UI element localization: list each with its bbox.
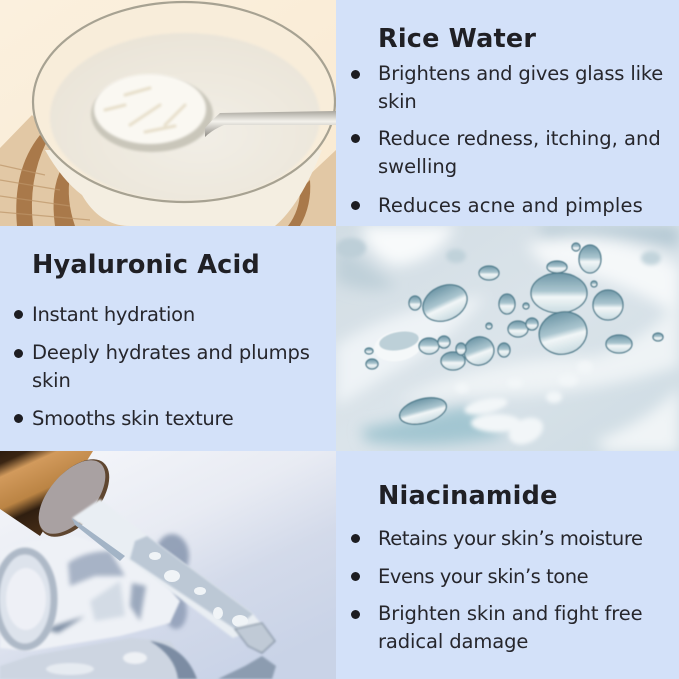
photo: rice water bowl [0, 0, 336, 226]
text: deeply hydrates: skin [32, 369, 71, 392]
photo: serum dropper and bottle [0, 451, 336, 679]
text: smooths: Smooths skin texture [32, 407, 233, 430]
panel: hyaluronic acid [0, 226, 336, 451]
panel: rice water [336, 0, 679, 226]
text: brighten: radical damage [378, 630, 528, 653]
text: brightens: skin [378, 90, 417, 113]
text: evens: Evens your skin’s tone [378, 565, 588, 588]
bullet: brighten [351, 610, 360, 619]
bullet: deeply hydrates [14, 349, 23, 358]
text: deeply hydrates: Deeply hydrates and plumps [32, 341, 310, 364]
bullet: smooths [14, 414, 23, 423]
text: reduce redness: Reduce redness, itching, and [378, 127, 661, 150]
text: brighten: Brighten skin and fight free [378, 602, 643, 625]
text: brightens [378, 62, 663, 113]
bullet: reduces acne [351, 201, 360, 210]
heading: Hyaluronic Acid: Hyaluronic Acid [32, 250, 260, 280]
text: reduce redness [378, 127, 661, 178]
bullet: instant hydration [14, 310, 23, 319]
bullet: brightens [351, 70, 360, 79]
text: deeply hydrates [32, 341, 310, 392]
text: reduce redness: swelling [378, 155, 457, 178]
heading: Rice Water: Rice Water [378, 24, 536, 54]
bullet: retains [351, 534, 360, 543]
bullet: reduce redness [351, 134, 360, 143]
text: retains: Retains your skin’s moisture [378, 527, 643, 550]
heading: Niacinamide: Niacinamide [378, 481, 558, 511]
photo: hyaluronic gel drops [336, 226, 679, 451]
text: brightens: Brightens and gives glass like [378, 62, 663, 85]
text: instant hydration: Instant hydration [32, 303, 195, 326]
text: brighten [378, 602, 643, 653]
panel: niacinamide [336, 451, 679, 679]
text: reduces acne: Reduces acne and pimples [378, 194, 643, 217]
bullet: evens [351, 572, 360, 581]
